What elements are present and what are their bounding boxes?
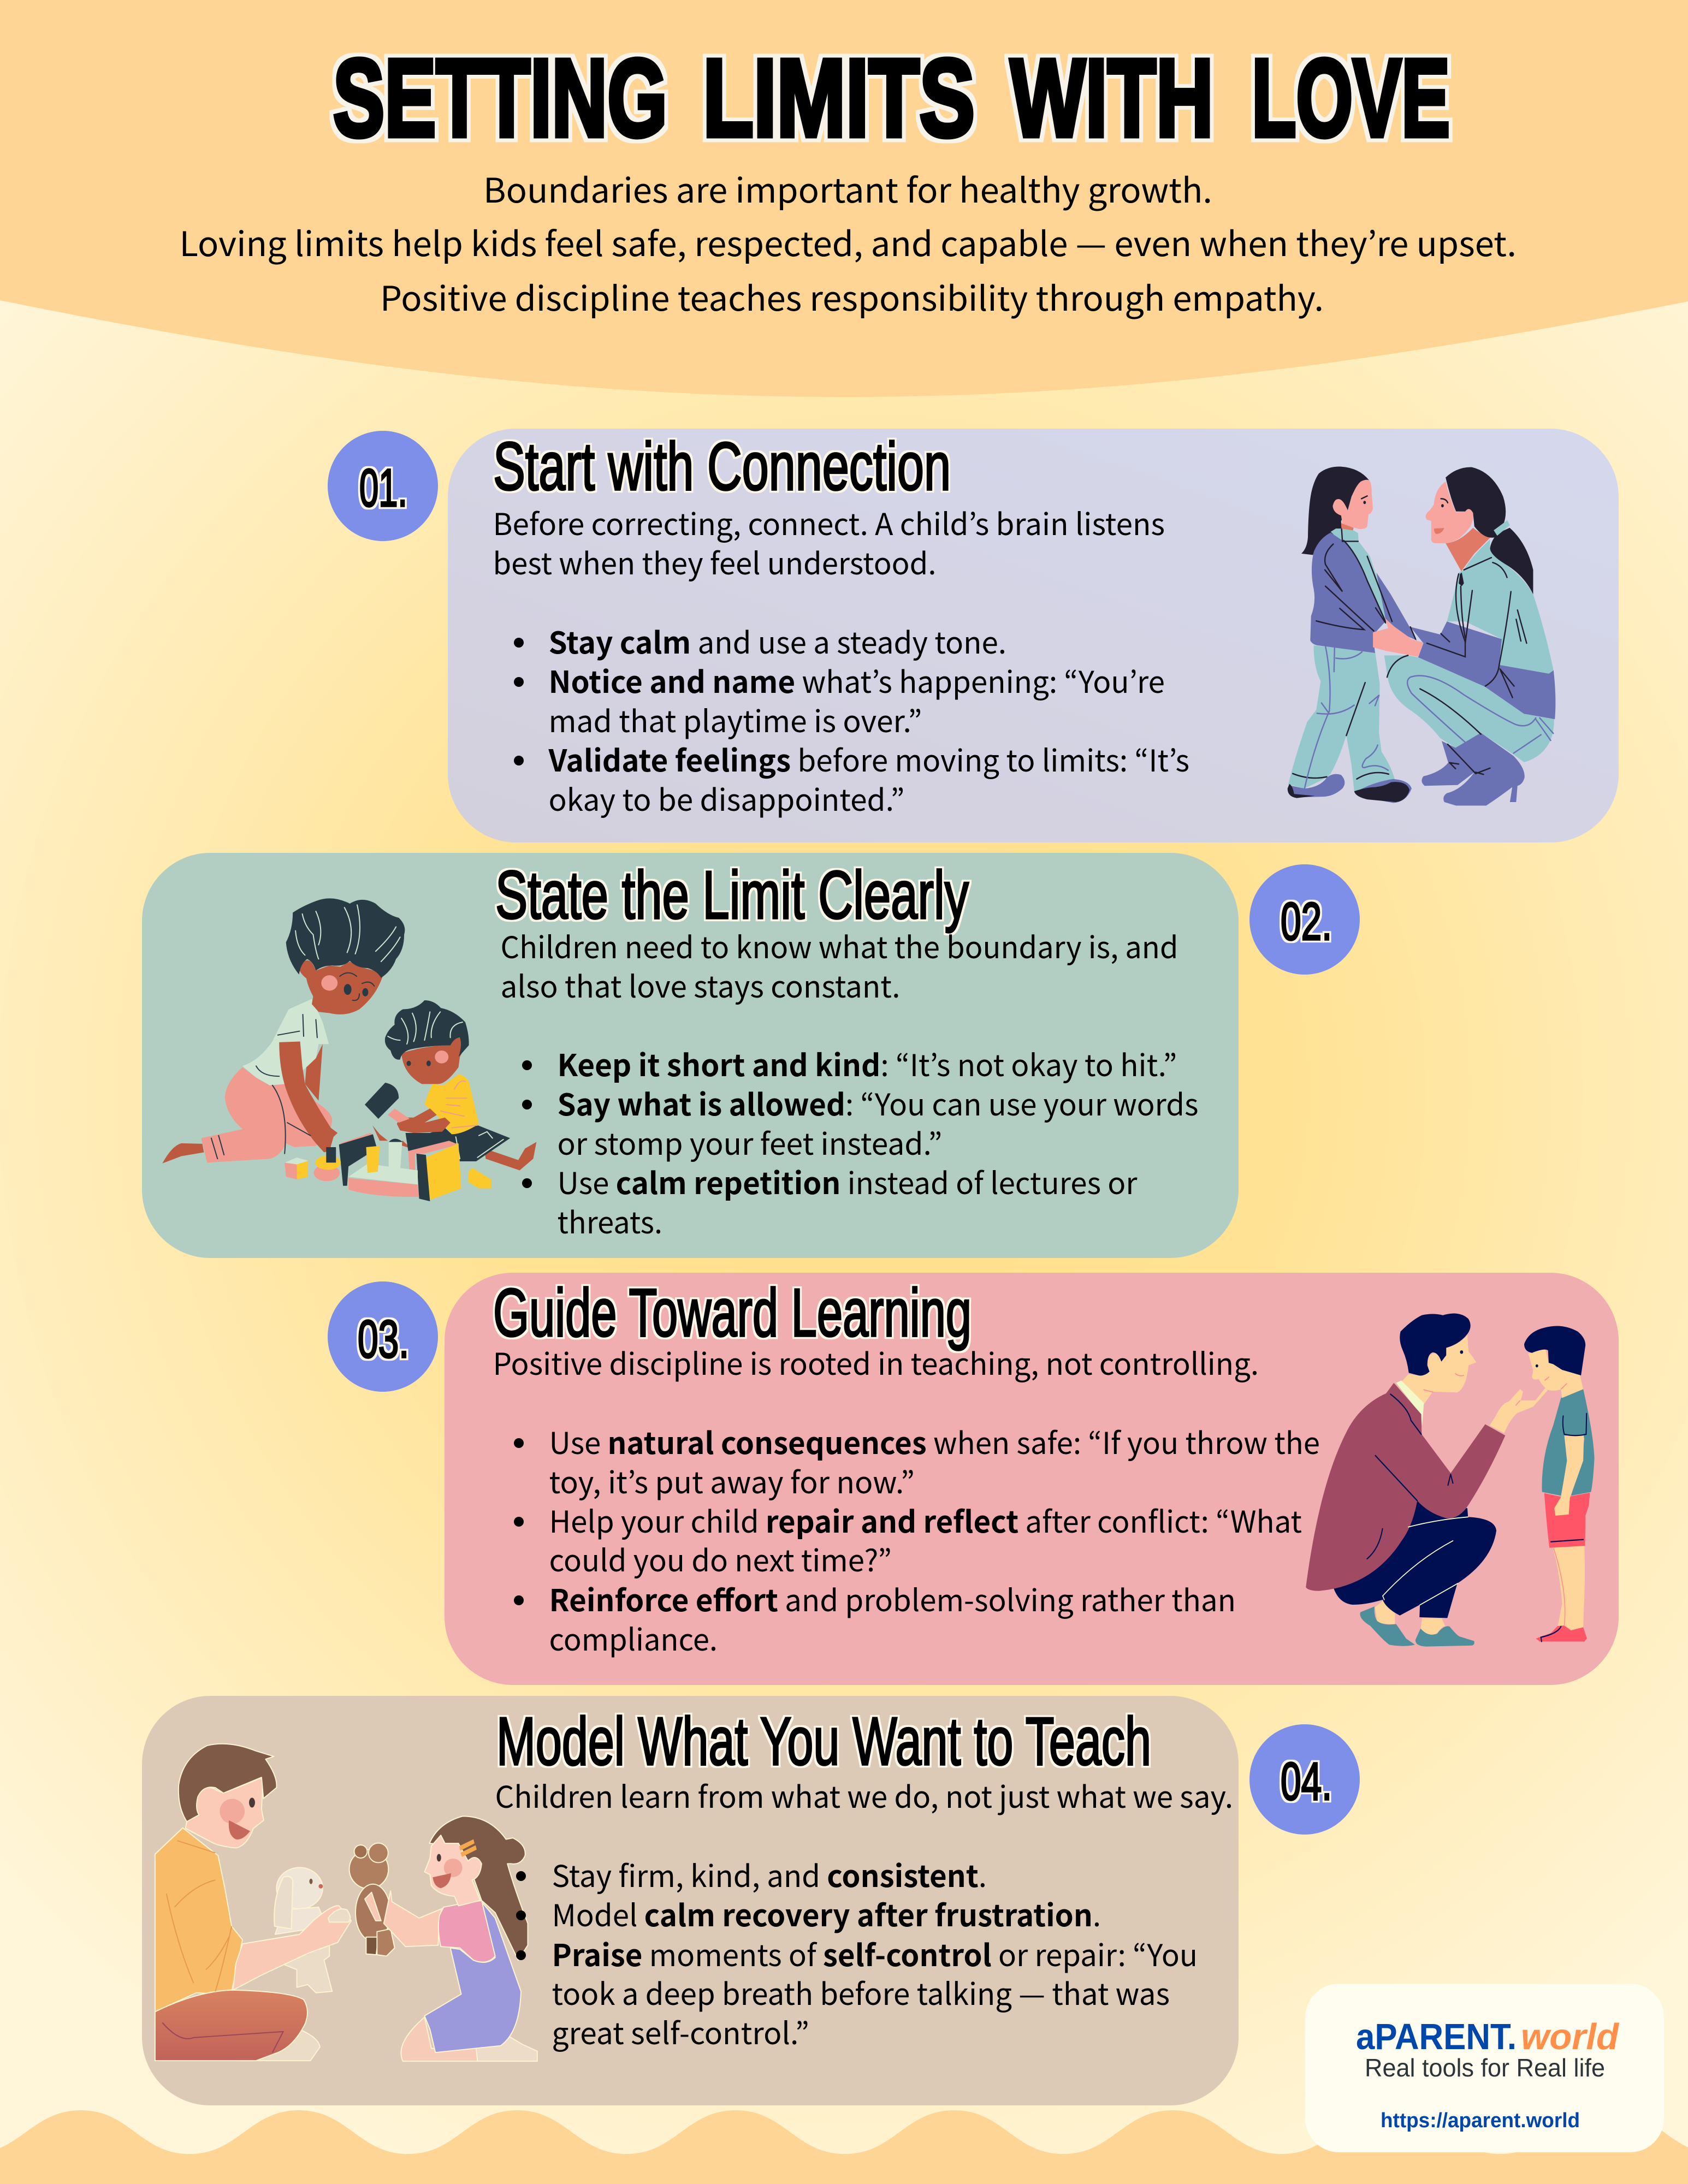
body text 3: toy, it’s put away for now.” xyxy=(549,1458,915,1502)
illustration: parent and child with toys xyxy=(155,1744,537,2061)
intro text: Positive discipline teaches responsibility through empathy. xyxy=(380,271,1324,321)
body text 1: Validate feelings before moving to limits: “It’s xyxy=(548,737,1189,780)
body text 3: Positive discipline is rooted in teaching, not controlling. xyxy=(493,1340,1259,1384)
number badge 04 xyxy=(1249,1724,1360,1835)
number badge 01: 01. xyxy=(359,458,407,518)
number badge 03: 03. xyxy=(358,1309,409,1369)
panel: start with connection xyxy=(328,429,1619,842)
panel 4 background xyxy=(142,1696,1239,2105)
body text 1: Notice and name what’s happening: “You’re xyxy=(548,658,1165,702)
illustration: mother and child with toy xyxy=(162,898,536,1201)
heading 1: Start with Connection xyxy=(493,429,951,505)
body text 4: took a deep breath before talking — that was xyxy=(552,1970,1170,2014)
logo card xyxy=(1305,1984,1664,2152)
body text 3: Help your child repair and reflect after conflict: “What xyxy=(549,1498,1302,1541)
panel: model what you want to teach xyxy=(142,1696,1360,2105)
body text 4: Praise moments of self-control or repair: “You xyxy=(552,1931,1198,1975)
body text 1: Stay calm and use a steady tone. xyxy=(548,619,1006,662)
intro text xyxy=(179,163,1517,321)
header band xyxy=(0,0,1688,397)
body text 1 xyxy=(493,500,1189,820)
panel: guide toward learning xyxy=(328,1273,1619,1685)
body text 4: Stay firm, kind, and consistent. xyxy=(552,1852,987,1896)
illustration: father and son xyxy=(1306,1314,1595,1647)
body text 2: Keep it short and kind: “It’s not okay to hit.” xyxy=(557,1041,1177,1085)
title: LIMITS xyxy=(703,36,975,159)
body text 1: okay to be disappointed.” xyxy=(548,776,904,820)
number badge 02: 02. xyxy=(1281,892,1332,951)
panel: state the limit clearly xyxy=(142,853,1360,1258)
body text 4: Children learn from what we do, not just what we say. xyxy=(495,1773,1233,1817)
panel 2 background xyxy=(142,853,1239,1258)
body text 4: Model calm recovery after frustration. xyxy=(552,1891,1101,1935)
title: LOVE xyxy=(1252,36,1450,159)
number badge 01 xyxy=(328,431,438,541)
tagline: Real tools for Real life xyxy=(1365,2054,1605,2082)
body text 3: Use natural consequences when safe: “If you throw the xyxy=(549,1419,1320,1463)
body text 3 xyxy=(493,1340,1320,1659)
website url: https://aparent.world xyxy=(1381,2109,1580,2132)
body text 4 xyxy=(495,1773,1233,2053)
logo wordmark xyxy=(1356,2016,1620,2057)
title: WITH xyxy=(1010,36,1213,159)
panel 3 background xyxy=(445,1273,1619,1685)
intro text: Loving limits help kids feel safe, respected, and capable — even when they’re upset. xyxy=(179,217,1517,266)
panel 1 background xyxy=(448,429,1619,842)
body text 2: or stomp your feet instead.” xyxy=(557,1120,943,1164)
body text 3: could you do next time?” xyxy=(549,1536,892,1580)
logo wordmark: world xyxy=(1521,2016,1620,2057)
intro text: Boundaries are important for healthy growth. xyxy=(483,163,1212,212)
body text 2: threats. xyxy=(557,1198,662,1242)
number badge 03 xyxy=(328,1281,438,1392)
title xyxy=(333,36,1450,159)
body text 2: also that love stays constant. xyxy=(500,963,900,1006)
bottom wave band xyxy=(0,2110,1688,2184)
number badge 02 xyxy=(1249,864,1360,975)
body text 2 xyxy=(500,923,1198,1242)
heading 3: Guide Toward Learning xyxy=(493,1275,972,1351)
heading 4: Model What You Want to Teach xyxy=(496,1704,1151,1779)
logo wordmark: aPARENT. xyxy=(1356,2016,1517,2057)
body text 2: Children need to know what the boundary is, and xyxy=(500,923,1178,967)
body text 1: Before correcting, connect. A child’s brain listens xyxy=(493,500,1165,544)
body text 2: Say what is allowed: “You can use your words xyxy=(557,1081,1198,1124)
body text 1: best when they feel understood. xyxy=(493,539,936,583)
illustration: mother and daughter xyxy=(1288,467,1555,806)
number badge 04: 04. xyxy=(1281,1752,1332,1811)
body text 2: Use calm repetition instead of lectures or xyxy=(557,1159,1138,1203)
card background xyxy=(1305,1984,1664,2152)
title: SETTING xyxy=(333,36,667,159)
heading 2: State the Limit Clearly xyxy=(495,858,969,933)
body text 3: compliance. xyxy=(549,1616,718,1659)
body text 3: Reinforce effort and problem-solving rather than xyxy=(549,1576,1236,1620)
body text 4: great self-control.” xyxy=(552,2009,809,2053)
body text 1: mad that playtime is over.” xyxy=(548,697,922,741)
